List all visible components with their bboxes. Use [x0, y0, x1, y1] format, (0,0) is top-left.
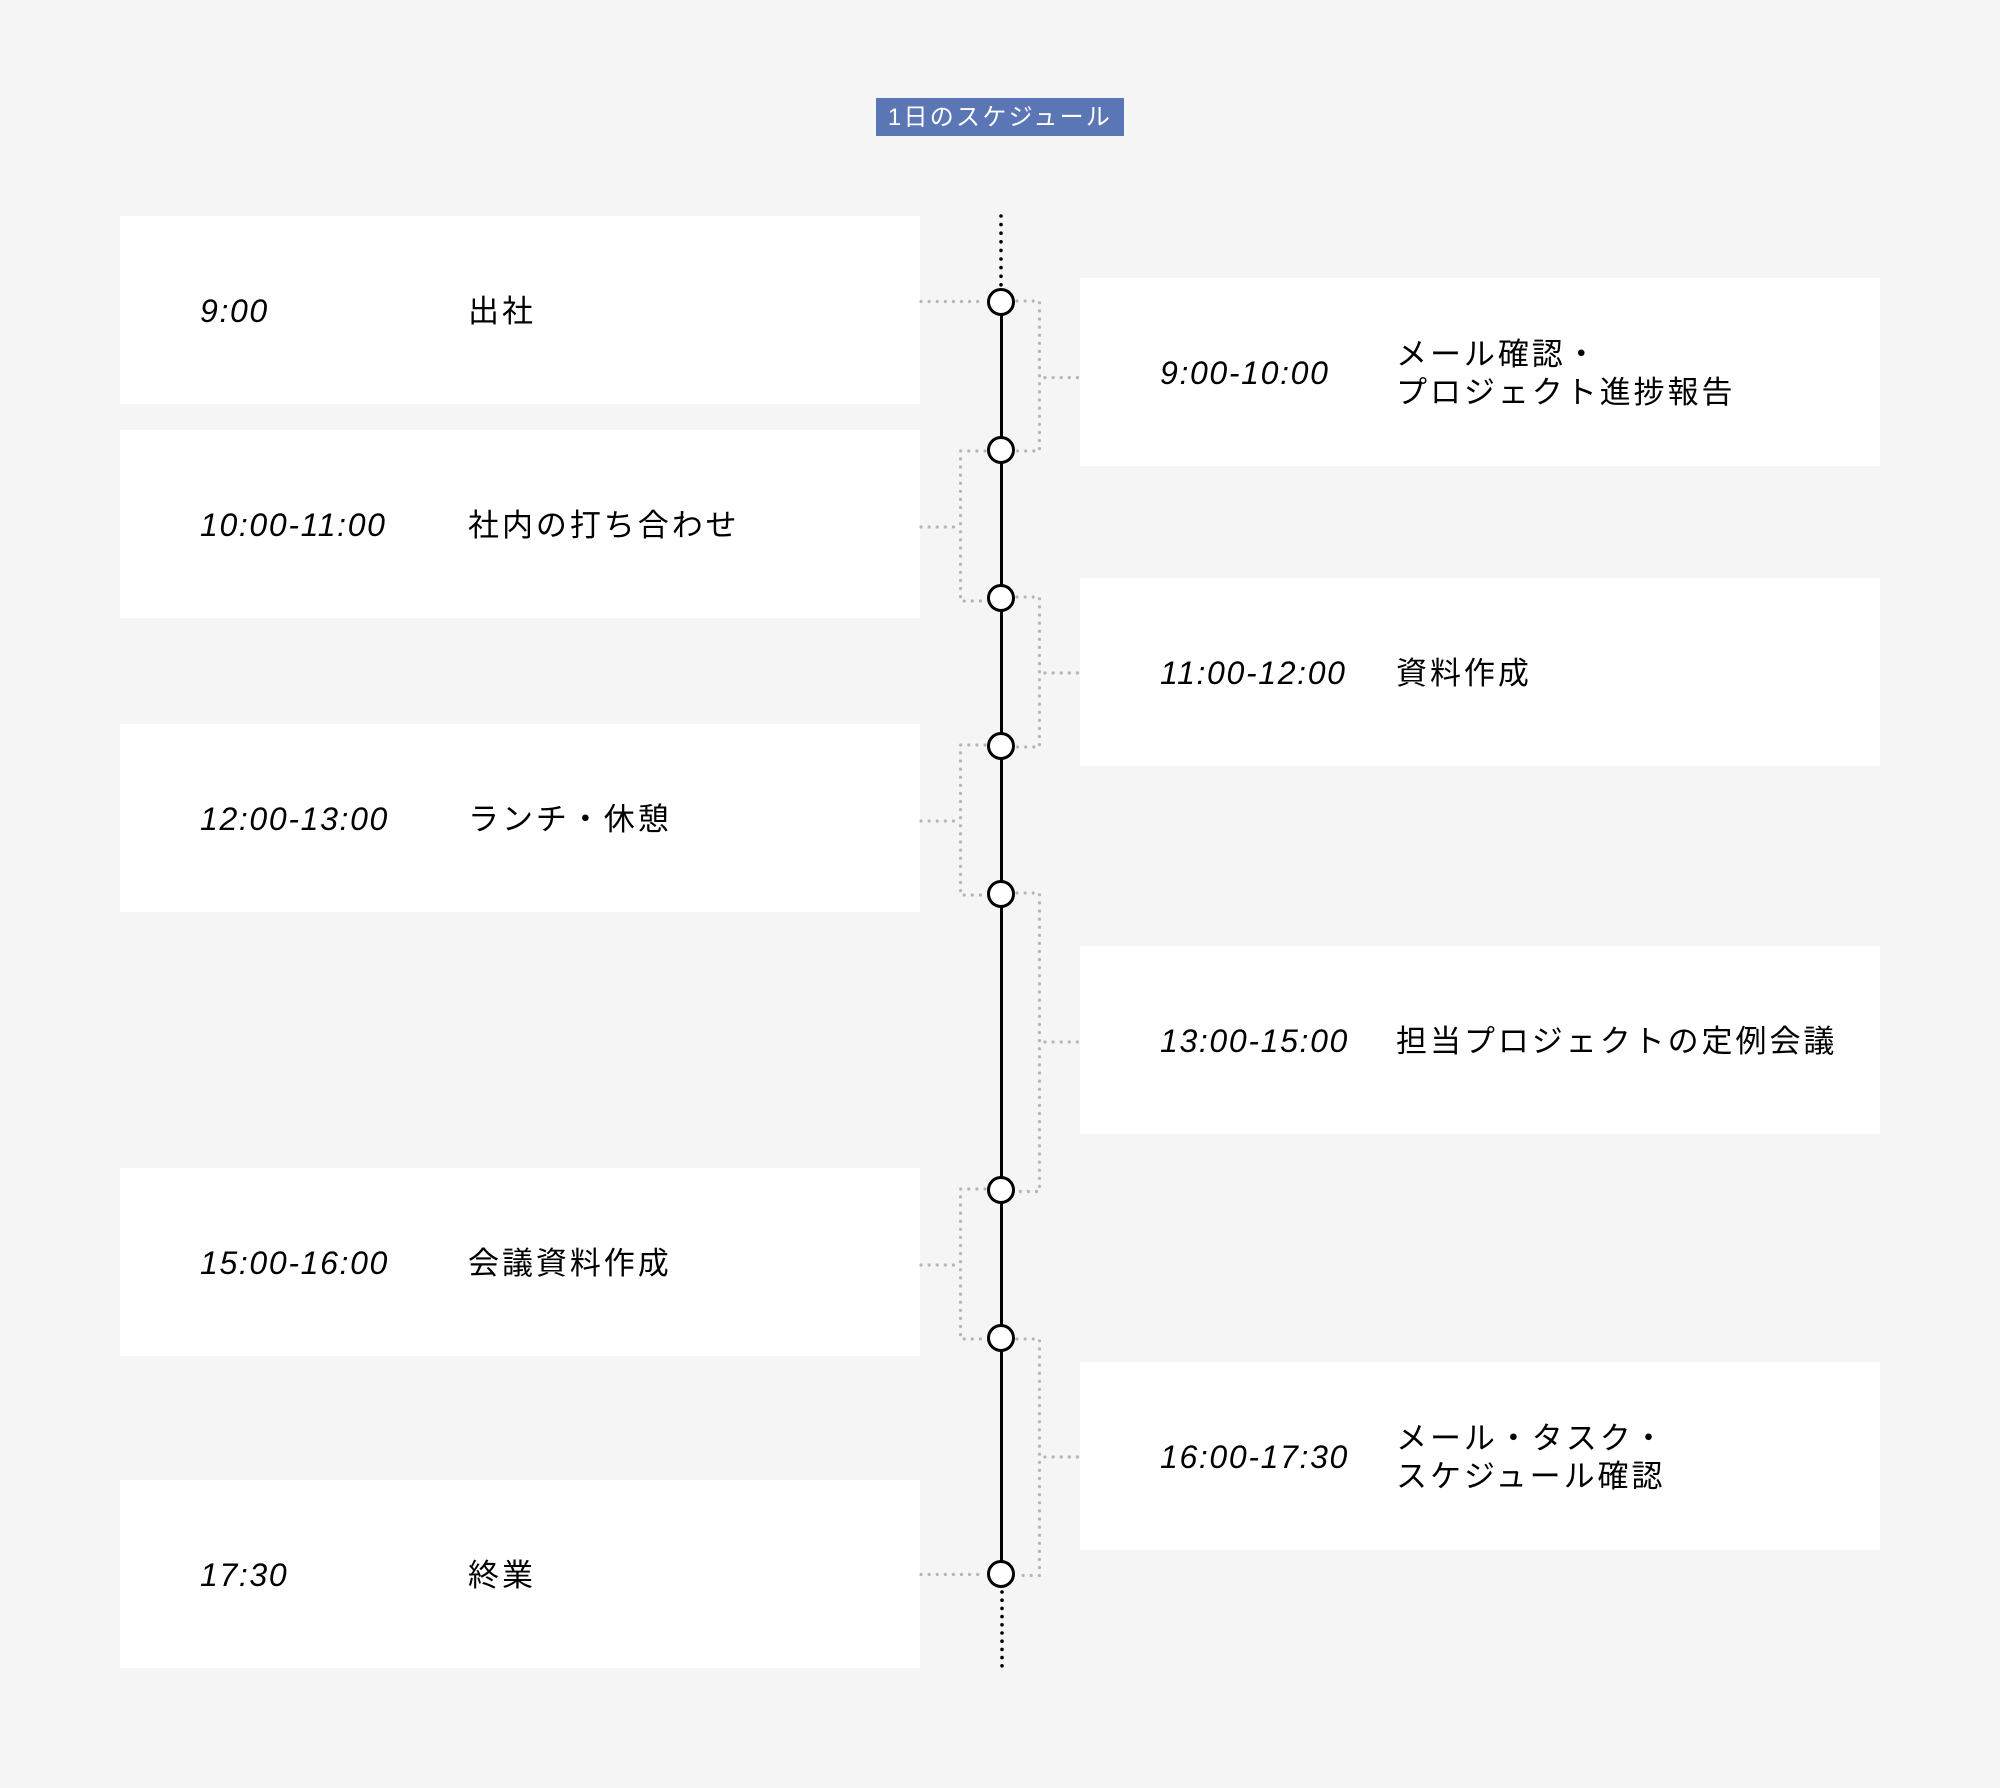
panel: 13:00-15:00 project meeting: 13:00-15:00: [1160, 1023, 1349, 1059]
panel: 9:00 arrival: 出社: [468, 294, 536, 329]
panel: 9:00-10:00 email: [1080, 278, 1880, 466]
panel: 13:00-15:00 project meeting: 担当プロジェクトの定例会議: [1396, 1024, 1837, 1059]
panel: 15:00-16:00 documents: 15:00-16:00: [200, 1245, 389, 1281]
connectors: grey dotted lines: [921, 301, 1080, 1576]
panel: 15:00-16:00 documents: 会議資料作成: [468, 1246, 672, 1281]
panel: 10:00-11:00 meeting: 社内の打ち合わせ: [468, 508, 740, 543]
timeline: top dotted end: [999, 216, 1003, 286]
panel: 17:30 leave: 17:30: [200, 1557, 288, 1593]
panel: 9:00 arrival: 9:00: [200, 293, 269, 329]
title: 1日のスケジュール: [888, 104, 1112, 131]
panel: 16:00-17:30 task check: [1080, 1362, 1880, 1550]
panel: 16:00-17:30 task check: 16:00-17:30: [1160, 1439, 1349, 1475]
panel: 11:00-12:00 materials: 11:00-12:00: [1160, 655, 1347, 691]
panel: 16:00-17:30 task check: メール・タスク・: [1396, 1421, 1667, 1456]
panel: 9:00-10:00 email: メール確認・: [1396, 337, 1600, 372]
panel: 12:00-13:00 lunch: [120, 724, 920, 912]
panel: 10:00-11:00 meeting: [120, 430, 920, 618]
panel: 16:00-17:30 task check: スケジュール確認: [1396, 1459, 1665, 1494]
panel: 12:00-13:00 lunch: ランチ・休憩: [468, 802, 672, 837]
panel: 10:00-11:00 meeting: 10:00-11:00: [200, 507, 387, 543]
panel: 17:30 leave: 終業: [468, 1558, 536, 1593]
panel: 9:00-10:00 email: 9:00-10:00: [1160, 355, 1330, 391]
panel: 9:00 arrival: [120, 216, 920, 404]
panel: 15:00-16:00 documents: [120, 1168, 920, 1356]
panel: 9:00-10:00 email: プロジェクト進捗報告: [1396, 375, 1736, 410]
panel: 13:00-15:00 project meeting: [1080, 946, 1880, 1134]
title: [876, 98, 1124, 136]
panel: 17:30 leave: [120, 1480, 920, 1668]
panel: 12:00-13:00 lunch: 12:00-13:00: [200, 801, 389, 837]
panel: 11:00-12:00 materials: [1080, 578, 1880, 766]
timeline: bottom dotted end: [1000, 1592, 1004, 1666]
timeline: solid axis: [1000, 302, 1003, 1574]
timeline nodes: [988, 290, 1014, 1586]
panel: 11:00-12:00 materials: 資料作成: [1396, 656, 1532, 691]
